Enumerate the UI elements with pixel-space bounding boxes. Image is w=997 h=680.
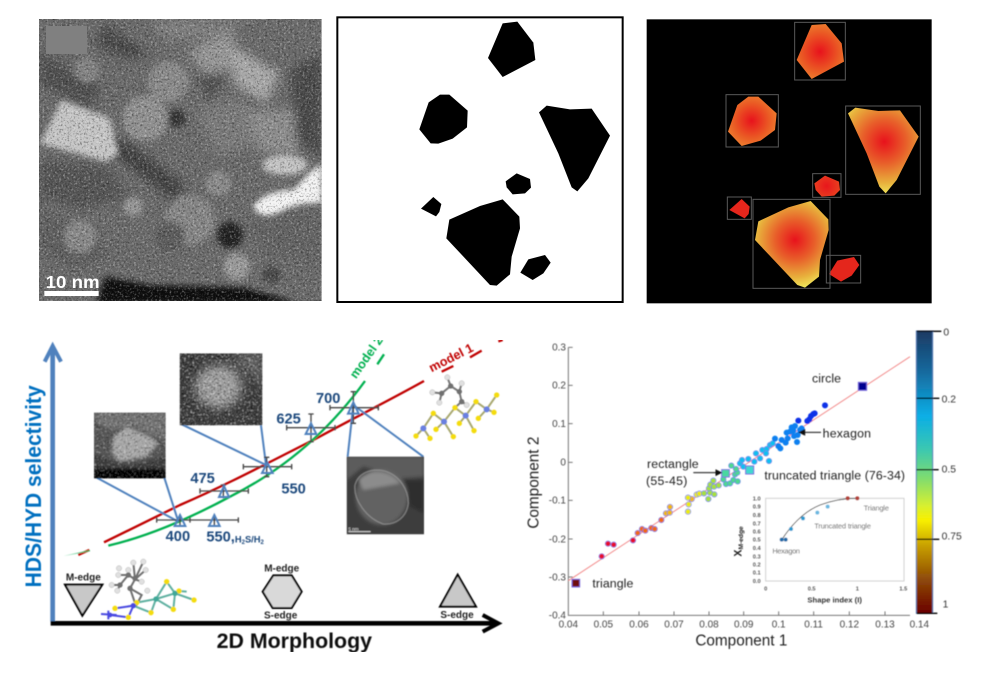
inset chart: shape index: Truncated triangle xyxy=(814,521,871,530)
shape: hexagon: M-edge xyxy=(264,564,300,575)
colour scale bar: 0.75 xyxy=(942,531,962,542)
particle heat maps xyxy=(728,24,919,288)
bounding boxes xyxy=(726,22,920,288)
TEM inset: particle 400 xyxy=(94,413,166,480)
y tick labels: -0.2 xyxy=(549,534,566,545)
y tick labels: 0.3 xyxy=(552,343,566,354)
inset chart: shape index: X xyxy=(733,550,745,557)
inset chart: shape index: Hexagon xyxy=(772,547,800,556)
temperature labels xyxy=(166,391,340,546)
temperature labels: 625 xyxy=(276,412,301,428)
temperature labels: S/H xyxy=(245,534,261,544)
TEM inset: particle 700 xyxy=(347,457,424,534)
x tick labels xyxy=(559,619,929,630)
data triangles xyxy=(175,402,359,526)
x tick labels: 0.1 xyxy=(772,619,786,630)
inset chart: shape index: 0 xyxy=(764,587,767,593)
y tick labels: 0.1 xyxy=(552,419,566,430)
start fragment of curves xyxy=(63,551,90,556)
inset chart: shape index: 0.7 xyxy=(753,521,761,527)
temperature labels: H xyxy=(235,534,242,544)
colour scale bar: 0.5 xyxy=(942,465,956,476)
inset chart: shape index: 1.5 xyxy=(899,587,907,593)
inset chart: shape index: 0.8 xyxy=(753,513,761,519)
x tick labels: 0.05 xyxy=(594,619,613,630)
shape: M-edge triangle xyxy=(65,572,102,616)
scale bar: 10 nm: 10 nm xyxy=(46,272,100,292)
inset chart: shape index: 0.4 xyxy=(753,546,762,552)
panel: electron microscope image xyxy=(39,19,322,303)
mask below clipped axis title xyxy=(200,652,400,662)
fit line xyxy=(568,357,910,581)
TEM inset: particle 550 xyxy=(180,353,262,425)
panel: heat map of particle shapes xyxy=(647,19,932,303)
scatter points xyxy=(599,441,775,559)
colour scale bar: 1 xyxy=(943,599,949,610)
point labels: truncated triangle (76-34) xyxy=(764,469,905,483)
temperature labels: 700 xyxy=(316,391,340,407)
shape: M-edge triangle: M-edge xyxy=(66,572,101,583)
x tick labels: 0.09 xyxy=(734,619,754,630)
TEM inset: particle 700: 5 nm xyxy=(348,527,359,532)
y tick labels: -0.4 xyxy=(549,611,566,622)
point labels: circle xyxy=(812,372,841,386)
point labels: (55-45) xyxy=(646,474,687,488)
inset chart: shape index: Shape index (I) xyxy=(807,595,862,604)
inset chart: shape index: 0.3 xyxy=(753,554,761,560)
point labels: hexagon xyxy=(823,426,871,440)
x tick labels: 0.04 xyxy=(559,619,578,630)
x tick labels: 0.08 xyxy=(699,619,719,630)
pointer arrows xyxy=(693,430,821,475)
temperature labels: 2 xyxy=(261,540,265,546)
inset chart: shape index: 1 xyxy=(856,587,859,593)
x axis title: 2D Morphology xyxy=(217,629,372,653)
inset chart: shape index: M-edge xyxy=(738,526,745,550)
y tick labels: 0.2 xyxy=(552,381,566,392)
inset chart: shape index: 0.1 xyxy=(753,571,761,577)
y tick labels xyxy=(549,343,566,622)
inset chart: shape index: Triangle xyxy=(864,504,889,513)
curve: model 2 xyxy=(108,354,384,546)
x tick labels: 0.11 xyxy=(804,619,823,630)
y tick labels: 0 xyxy=(560,458,566,469)
x tick labels: 0.12 xyxy=(840,619,859,630)
shape: hexagon: S-edge xyxy=(264,611,298,622)
x tick labels: 0.14 xyxy=(910,619,929,630)
y axis title: HDS/HYD selectivity xyxy=(21,385,46,587)
colour scale bar: 0 xyxy=(943,327,949,338)
connector lines xyxy=(97,405,423,522)
x tick labels: 0.07 xyxy=(664,619,684,630)
colour scale bar xyxy=(916,327,962,613)
x axis arrow xyxy=(51,615,498,632)
y tick labels: -0.1 xyxy=(549,496,566,507)
model labels xyxy=(347,334,476,381)
axis titles: Component 1 xyxy=(695,632,787,649)
particle silhouettes xyxy=(419,22,610,286)
x tick labels: 0.13 xyxy=(875,619,895,630)
inset chart: shape index: 0.9 xyxy=(753,505,761,511)
point labels xyxy=(592,372,905,591)
point labels: triangle xyxy=(592,577,633,591)
colour scale bar: 0.2 xyxy=(942,394,956,405)
error bars xyxy=(157,392,378,527)
model labels: model 2 xyxy=(347,334,386,381)
axis titles: Component 2 xyxy=(526,437,543,529)
curve: model 1 xyxy=(78,340,503,555)
shape: S-edge triangle xyxy=(440,575,476,621)
inset chart: shape index: 0.6 xyxy=(753,529,761,535)
molecule: adsorbed on M-edge xyxy=(101,559,197,620)
point labels: rectangle xyxy=(647,457,699,471)
inset chart: shape index: 0.5 xyxy=(808,587,816,593)
temperature labels: 550 xyxy=(281,481,306,497)
molecule: adsorbed on S-edge xyxy=(413,375,499,441)
reference squares xyxy=(572,382,867,587)
shape: hexagon xyxy=(263,564,302,622)
temperature labels: 550, xyxy=(206,529,235,545)
panel: binary segmentation mask xyxy=(337,17,623,302)
temperature labels: 2 xyxy=(242,540,246,546)
shape: S-edge triangle: S-edge xyxy=(440,610,474,621)
inset chart: shape index: 1.0 xyxy=(753,496,761,502)
panel: component scatter plot xyxy=(526,327,962,649)
model labels: model 1 xyxy=(427,341,476,375)
inset chart: shape index: 0.2 xyxy=(753,562,761,568)
plot axes xyxy=(568,347,910,615)
temperature labels: 475 xyxy=(190,471,215,487)
temperature labels: 400 xyxy=(166,529,190,545)
mask above clipped model labels xyxy=(360,325,520,340)
panel: selectivity vs 2D morphology chart xyxy=(21,334,503,653)
y tick labels: -0.3 xyxy=(549,572,566,583)
inset chart: shape index xyxy=(733,496,907,604)
axis titles xyxy=(526,437,787,649)
y axis arrow xyxy=(45,346,61,622)
inset chart: shape index: 0.0 xyxy=(753,579,761,585)
inset chart: shape index: 0.5 xyxy=(753,538,761,544)
x tick labels: 0.06 xyxy=(629,619,649,630)
